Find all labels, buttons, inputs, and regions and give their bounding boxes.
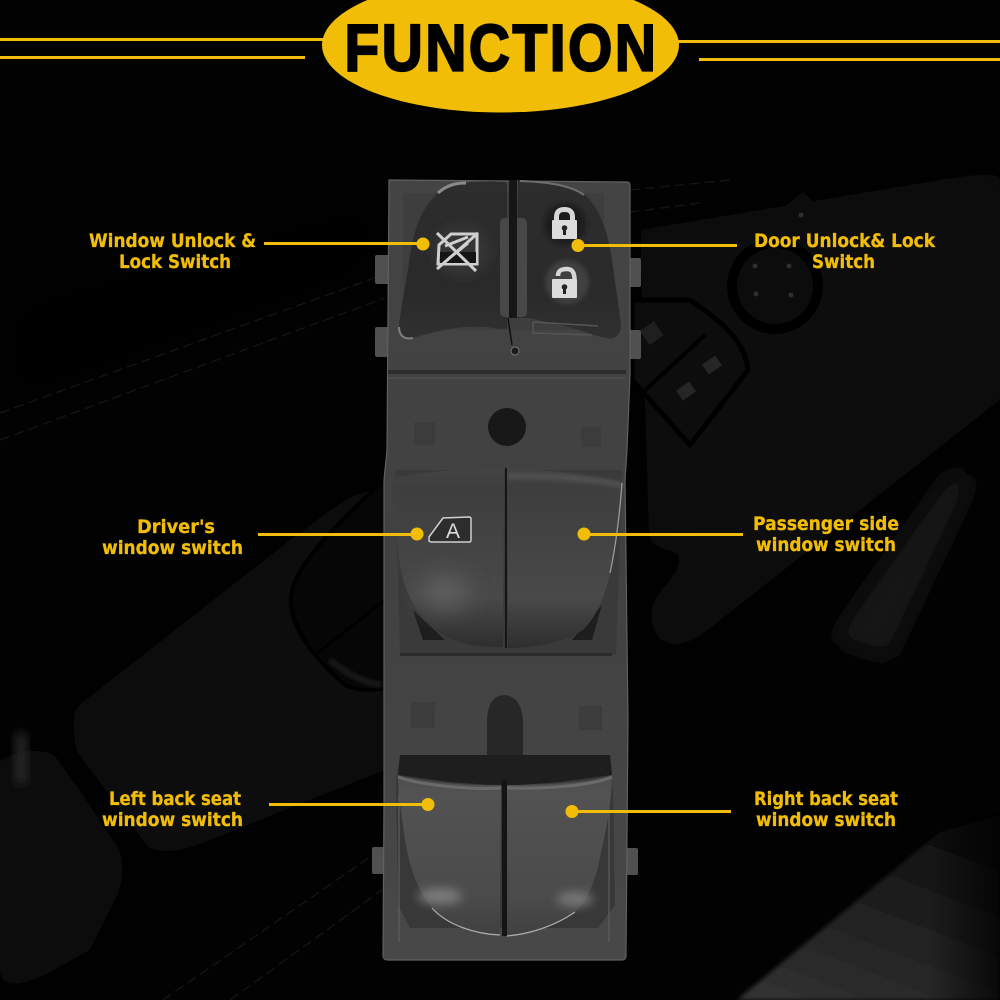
callout: door lock: Door Unlock& Lock (754, 230, 935, 252)
callout: right back seat: window switch (756, 809, 896, 831)
title badge (322, 0, 679, 112)
center slot (500, 180, 527, 355)
header line right upper (670, 40, 1000, 43)
background: mirror adjuster knob (727, 192, 848, 334)
callout: left back seat: window switch (102, 809, 243, 831)
background: door handle recess (291, 480, 385, 690)
callout: door lock (572, 230, 935, 273)
left back seat rocker (398, 775, 501, 935)
callout: window lock (89, 230, 430, 273)
callout: passenger window: window switch (756, 534, 896, 556)
callout: door lock: Switch (812, 251, 875, 273)
lower rocker recess (396, 755, 615, 928)
passenger window rocker (507, 468, 622, 648)
callout: window lock: Window Unlock & (89, 230, 256, 252)
switch panel product (372, 180, 641, 960)
callout: right back seat (566, 788, 898, 831)
driver window rocker (392, 468, 504, 647)
callout: driver window: window switch (102, 537, 243, 559)
icon: auto window A: A (446, 520, 460, 543)
icon: auto window A (429, 517, 471, 543)
title badge: FUNCTION (344, 12, 656, 86)
background: red stitching (0, 180, 730, 1000)
header line right lower (699, 58, 1000, 61)
icon: closed lock (552, 210, 577, 239)
icon: open lock (552, 269, 577, 298)
mounting tabs (372, 255, 641, 875)
hole and square marks (411, 408, 602, 755)
callout: right back seat: Right back seat (754, 788, 898, 810)
callout: left back seat (102, 788, 434, 831)
header line left upper (0, 38, 330, 41)
top rocker: window lock (399, 181, 507, 339)
callout: driver window (102, 516, 424, 559)
top rocker: door lock (500, 180, 621, 355)
callout: driver window: Driver's (137, 516, 215, 538)
callout: window lock: Lock Switch (119, 251, 231, 273)
header line left lower (0, 56, 305, 59)
callout: passenger window: Passenger side (753, 513, 899, 535)
callout: left back seat: Left back seat (109, 788, 241, 810)
panel body (383, 180, 630, 960)
icon: window lock symbol (437, 233, 478, 271)
callout: passenger window (578, 513, 899, 556)
middle rocker recess (395, 470, 622, 655)
background: window switch cluster (632, 300, 748, 445)
right back seat rocker (507, 775, 612, 936)
